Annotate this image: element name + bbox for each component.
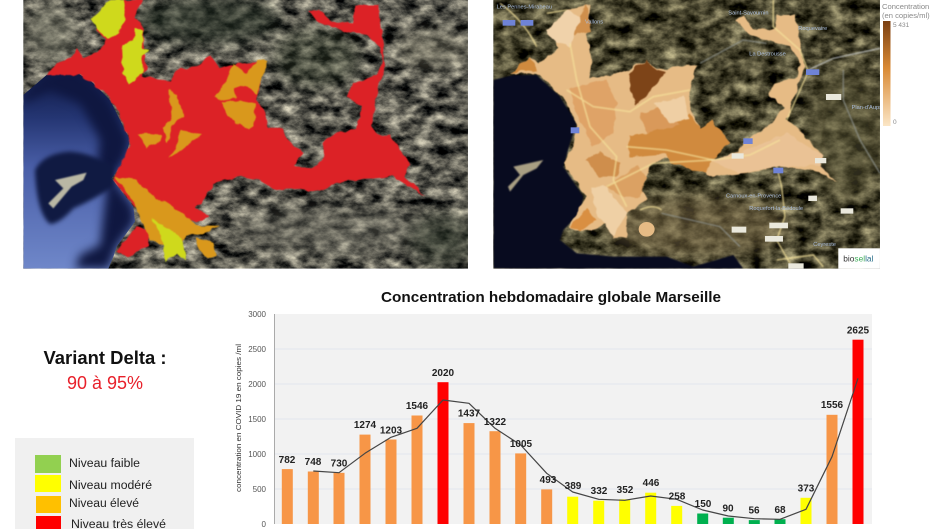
bar values: 2625 [847,326,870,336]
bar values: 90 [722,504,734,514]
bars [282,340,864,524]
satellite terrain [493,0,887,269]
place names: Roquefort-la-Bédoule [749,206,803,212]
concentration colour scale: 5 431 [893,22,910,29]
zones: modéré [92,0,185,262]
bar values: 1005 [510,439,533,450]
bar values: 373 [798,484,815,494]
variant callout: Variant Delta : [44,348,166,368]
bar values: 1274 [354,420,377,431]
sectors [510,5,836,238]
islands [508,160,543,192]
map: concentration by sector [493,0,887,269]
bar values: 150 [695,499,712,510]
zone: très élevé sud [117,227,148,257]
logo: biosellal: biosellal [843,254,874,264]
moving average line [313,378,858,519]
dark shallows around islands [35,152,113,224]
concentration colour scale: (en copies/ml) [882,11,930,20]
place names: Roquevaire [798,26,827,32]
bar values: 389 [565,481,582,492]
concentration colour scale [882,2,930,126]
bar values: 56 [748,506,760,516]
bar values: 332 [591,486,608,497]
place names: Ceyreste [813,242,836,248]
chart title: Concentration hebdomadaire globale Marseille [381,289,721,306]
place names: Les Pennes-Mirabeau [497,5,552,11]
place names [497,5,882,248]
zone: très élevé [47,0,425,222]
bar values: 748 [305,457,322,468]
bar values: 1437 [458,408,481,420]
bar values: 1322 [484,417,507,428]
bar values: 2020 [432,368,455,379]
dark coastal water [23,69,135,269]
zone outline [510,5,836,238]
bar values: 782 [279,455,296,466]
bar values: 1203 [380,426,403,436]
y axis values: 0 [262,520,267,529]
legend: niveau faible [35,455,140,473]
y axis values [248,310,267,529]
bar values [279,326,870,516]
bar values: 258 [669,492,686,502]
sector shades [510,5,823,237]
logo: biosellal [838,248,880,269]
secondary roads [662,40,880,247]
bar values: 730 [331,458,348,470]
sector: highest concentration [627,60,665,106]
y axis values: 500 [253,485,267,494]
road markers [503,20,819,173]
concentration colour scale: Concentration [882,2,929,11]
legend: niveau élevé [36,496,139,513]
sea [23,67,137,269]
islands [48,173,87,208]
legend: niveau faible: Niveau faible [69,458,140,470]
bar values: 493 [540,475,557,486]
legend: niveau très élevé [36,516,166,529]
legend: niveau modéré [35,475,152,492]
y axis values: 2000 [248,380,267,389]
concentration colour scale: 0 [893,119,897,126]
y axis values: 3000 [248,310,267,319]
variant callout: 90 à 95% [67,373,143,393]
variant callout [44,348,166,393]
roads [500,0,880,267]
y axis values: 1500 [248,415,267,424]
bar chart [234,310,872,529]
bar values: 1546 [406,401,429,412]
y axis values: 2500 [248,345,267,354]
plot area [275,314,872,524]
place names: Carnoux-en-Provence [726,193,781,199]
satellite terrain [23,0,477,269]
place names: Plan-d'Aups [852,105,882,111]
place names: La Destrousse [749,51,786,57]
bar values: 446 [643,478,660,489]
place names: Vallons [585,19,603,25]
map: alert levels by sector [23,0,477,269]
place names: Saint-Savournin [728,10,769,16]
zones: élevé [115,61,268,259]
legend panel [15,438,194,529]
bar values: 1556 [821,400,844,411]
sea [493,75,743,269]
alert zones [47,0,425,262]
y axis values: 1000 [248,450,267,459]
bar values: 352 [617,485,634,496]
bar values: 68 [774,505,786,516]
legend: niveau modéré: Niveau modéré [69,480,152,492]
y axis title: concentration en COVID 19 en copies /ml [234,344,243,492]
legend: niveau élevé: Niveau élevé [69,498,139,510]
separate zone [639,222,655,237]
